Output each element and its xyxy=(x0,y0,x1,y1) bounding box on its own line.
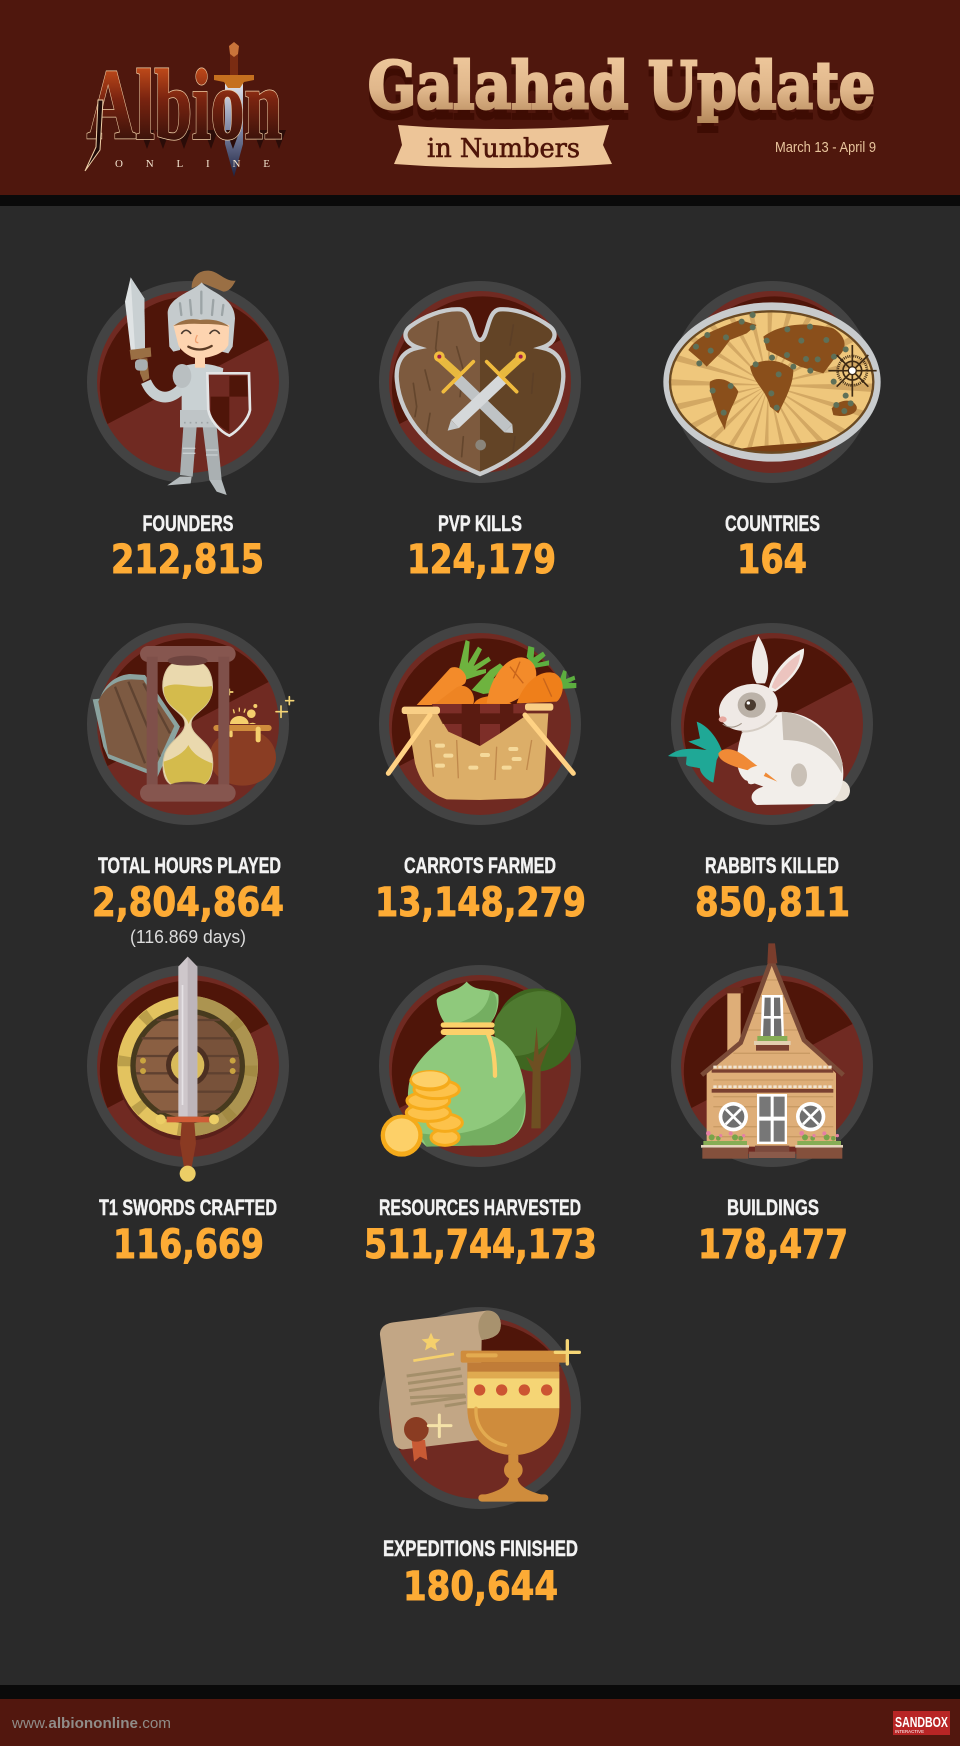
label: RESOURCES HARVESTED xyxy=(379,1195,581,1220)
value: 178,477 xyxy=(698,1222,848,1268)
circle background xyxy=(379,1307,581,1509)
icon: world map xyxy=(663,302,881,462)
circle background xyxy=(671,623,873,825)
sandbox interactive logo xyxy=(893,1711,950,1735)
value: 212,815 xyxy=(111,537,264,583)
label: COUNTRIES xyxy=(725,511,820,536)
label: EXPEDITIONS FINISHED xyxy=(383,1536,578,1561)
circle background xyxy=(671,965,873,1167)
icon: house xyxy=(701,943,843,1159)
value: 511,744,173 xyxy=(364,1222,597,1268)
circle background xyxy=(379,965,581,1167)
label: RABBITS KILLED xyxy=(705,853,839,878)
value: 124,179 xyxy=(407,537,556,583)
circle background xyxy=(87,281,289,483)
panel: t1 swords crafted xyxy=(87,957,289,1268)
icon: wooden shield with crossed swords xyxy=(397,309,563,474)
title: Galahad Update xyxy=(368,58,875,134)
panel: buildings xyxy=(671,943,873,1268)
date range: March 13 - April 9 xyxy=(775,139,876,156)
icon: sword and round shield xyxy=(117,957,258,1182)
panel: resources harvested xyxy=(364,965,597,1268)
value: 180,644 xyxy=(403,1564,558,1610)
panel: carrots farmed xyxy=(375,623,586,926)
icon: rabbit with carrot xyxy=(668,636,850,805)
header band xyxy=(0,0,960,206)
icon: scroll and goblet xyxy=(380,1311,579,1502)
icon: money bag, coins and tree xyxy=(381,982,576,1157)
logo: Albion Online: Albion xyxy=(87,49,282,160)
note: days: (116.869 days) xyxy=(130,927,246,947)
footer band xyxy=(0,1685,960,1746)
circle background xyxy=(379,623,581,825)
value: 13,148,279 xyxy=(375,880,586,926)
circle background xyxy=(671,281,873,483)
label: CARROTS FARMED xyxy=(404,853,556,878)
panel: founders xyxy=(87,271,289,583)
label: T1 SWORDS CRAFTED xyxy=(99,1195,277,1220)
circle background xyxy=(379,281,581,483)
logo: Albion Online: Albion xyxy=(87,49,282,160)
website url: www.albiononline.com xyxy=(11,1715,171,1732)
logo: Albion Online: ONLINE xyxy=(115,158,270,170)
sandbox interactive logo: INTERACTIVE xyxy=(895,1729,924,1734)
icon: carrot basket xyxy=(388,640,576,800)
label: FOUNDERS xyxy=(142,511,234,536)
panel: expeditions finished xyxy=(379,1307,581,1610)
label: TOTAL HOURS PLAYED xyxy=(98,853,281,878)
panel: total hours played xyxy=(87,623,294,947)
circle background xyxy=(87,965,289,1167)
value: 164 xyxy=(737,537,807,583)
icon: hourglass with shield and pot xyxy=(93,646,294,802)
title: Galahad Update xyxy=(368,48,875,124)
value: 2,804,864 xyxy=(92,880,284,926)
ribbon: in Numbers xyxy=(394,125,612,168)
value: 850,811 xyxy=(695,880,850,926)
label: BUILDINGS xyxy=(727,1195,819,1220)
icon: knight xyxy=(125,271,250,495)
panel: countries xyxy=(663,281,881,583)
circle background xyxy=(87,623,289,825)
value: 116,669 xyxy=(113,1222,264,1268)
icon: logo sword xyxy=(214,42,254,177)
panel: pvp kills xyxy=(379,281,581,583)
ribbon: in Numbers: in Numbers xyxy=(427,134,580,164)
logo: Albion Online xyxy=(85,42,286,177)
label: PVP KILLS xyxy=(438,511,522,536)
panel: rabbits killed xyxy=(668,623,873,926)
